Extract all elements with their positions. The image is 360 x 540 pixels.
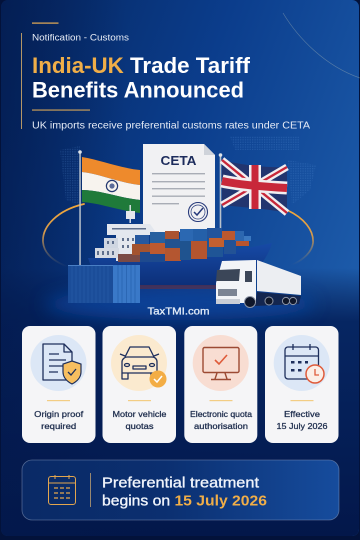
callout text: Preferential treatment <box>102 474 260 492</box>
panel: origin proof <box>22 326 96 443</box>
eyebrow: Notification - Customs <box>32 32 130 42</box>
hero illustration <box>43 136 316 320</box>
CETA document <box>143 144 215 232</box>
icon: car with check <box>111 335 167 391</box>
label: Origin proof <box>34 409 84 419</box>
truck <box>216 260 301 308</box>
label: Electronic quota <box>190 409 252 419</box>
ship containers <box>118 228 251 262</box>
panel: electronic quota <box>184 326 257 443</box>
India flag <box>78 150 140 268</box>
gold arcs <box>43 204 313 267</box>
subtitle: UK imports receive preferential customs rates under CETA <box>32 120 310 132</box>
icon: monitor with check <box>193 335 249 391</box>
truck cab <box>216 260 256 303</box>
panel: effective date <box>265 326 338 443</box>
panel: motor vehicle <box>102 326 176 443</box>
label <box>190 409 252 431</box>
label <box>112 409 167 431</box>
watermark: TaxTMI.com <box>148 306 210 318</box>
header text block <box>21 22 310 132</box>
callout: start date <box>22 460 339 520</box>
title: Benefits Announced <box>32 78 244 102</box>
label: required <box>41 421 77 431</box>
world map dots <box>60 136 316 205</box>
UK flag <box>219 153 287 233</box>
CETA heading: CETA <box>160 154 196 168</box>
label: authorisation <box>194 421 248 431</box>
cargo ship <box>88 205 272 289</box>
label: quotas <box>126 421 154 431</box>
icon: gold calendar <box>48 475 76 504</box>
sea glow <box>45 288 315 320</box>
shipping container <box>68 265 140 303</box>
seal icon <box>188 202 208 222</box>
truck wheels <box>244 296 297 308</box>
label <box>34 409 84 431</box>
label: Effective <box>284 409 320 419</box>
label: Motor vehicle <box>112 409 167 419</box>
label <box>276 409 328 431</box>
ship hull <box>88 243 272 286</box>
truck trailer <box>257 260 301 295</box>
title: India-UK Trade Tariff <box>32 53 251 78</box>
ship superstructure <box>95 205 155 261</box>
icon: document with shield <box>30 335 86 391</box>
icon: calendar with clock <box>274 335 330 391</box>
label: 15 July 2026 <box>276 421 328 431</box>
callout text: begins on 15 July 2026 <box>102 492 267 510</box>
title <box>32 53 251 102</box>
callout text <box>102 474 267 510</box>
